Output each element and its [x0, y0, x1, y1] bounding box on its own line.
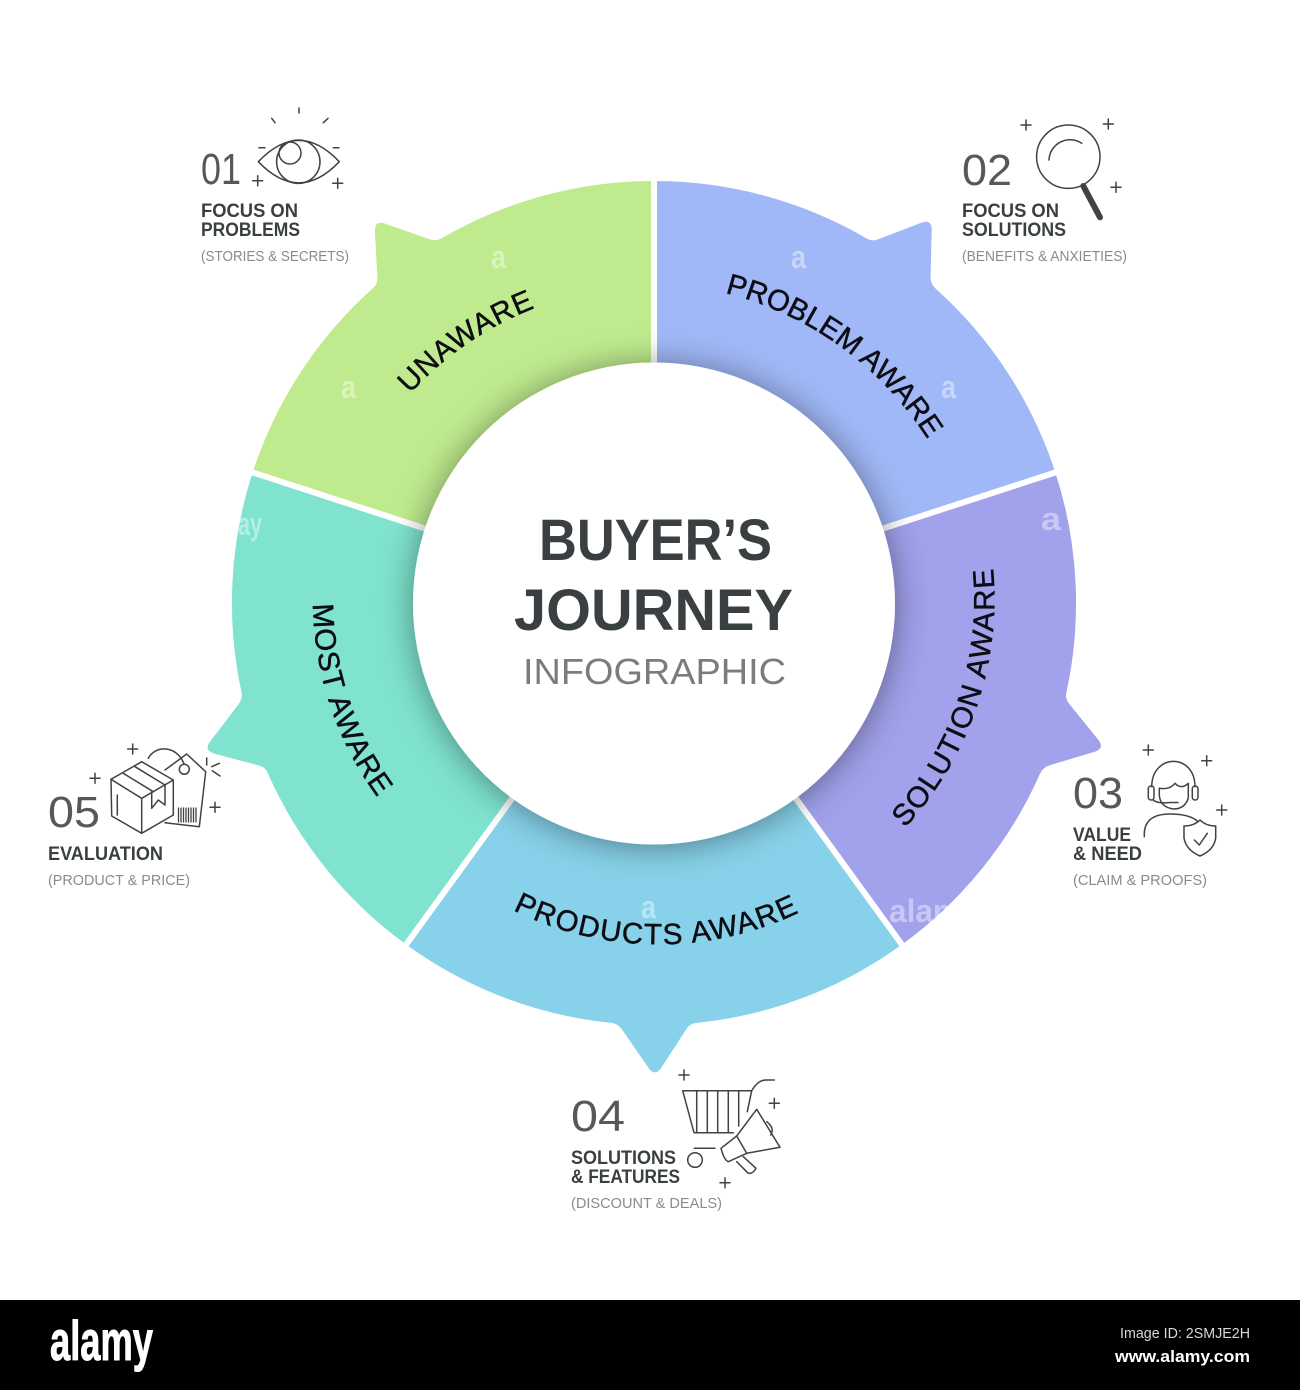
donut diagram: a — [491, 239, 506, 275]
label: unaware: UNAWARE — [396, 290, 534, 390]
block 02: focus on solutions: (BENEFITS & ANXIETIES) — [962, 248, 1127, 265]
block 02: focus on solutions: SOLUTIONS — [962, 220, 1066, 241]
footer bar — [0, 1300, 1300, 1390]
segment: solution aware — [654, 473, 1179, 985]
icon: magnifying glass — [1021, 119, 1121, 217]
title: BUYER’S — [539, 508, 772, 573]
donut diagram: a — [941, 369, 956, 405]
label: solution aware: SOLUTION AWARE — [893, 570, 995, 825]
segment: problem aware — [654, 181, 1055, 603]
block 02: focus on solutions — [962, 119, 1127, 265]
block 05: evaluation: 05 — [48, 788, 100, 837]
icon: cart and megaphone — [679, 1070, 780, 1188]
donut diagram: a — [641, 889, 656, 925]
block 04: solutions and features: & FEATURES — [571, 1167, 680, 1188]
footer url: www.alamy.com — [1114, 1347, 1250, 1366]
donut diagram: ay — [238, 506, 262, 542]
segment: most aware — [81, 367, 654, 944]
block 05: evaluation — [48, 744, 220, 889]
donut diagram: alam — [889, 893, 961, 929]
label: most aware: MOST AWARE — [312, 605, 394, 797]
footer image id: Image ID: 2SMJE2H — [1120, 1325, 1250, 1342]
block 01: focus on problems: PROBLEMS — [201, 220, 300, 241]
block 03: value and need: VALUE — [1073, 825, 1131, 846]
title — [514, 508, 793, 692]
block 05: evaluation: (PRODUCT & PRICE) — [48, 872, 190, 889]
block 01: focus on problems: FOCUS ON — [201, 201, 298, 222]
donut diagram: a — [791, 239, 806, 275]
icon: eye — [253, 108, 343, 188]
block 04: solutions and features — [571, 1070, 780, 1212]
block 03: value and need — [1073, 745, 1227, 889]
block 01: focus on problems: (STORIES & SECRETS) — [201, 248, 349, 265]
block 03: value and need: (CLAIM & PROOFS) — [1073, 872, 1207, 889]
block 03: value and need: 03 — [1073, 769, 1123, 818]
block 04: solutions and features: SOLUTIONS — [571, 1148, 676, 1169]
block 01: focus on problems: 01 — [201, 145, 241, 194]
icon: box and price tag — [90, 744, 220, 833]
donut diagram — [81, 91, 1179, 1180]
label: problem aware: PROBLEM AWARE — [727, 274, 944, 438]
center white circle — [413, 362, 895, 844]
label: products aware: PRODUCTS AWARE — [514, 892, 798, 945]
title: JOURNEY — [514, 578, 793, 643]
block 03: value and need: & NEED — [1073, 844, 1142, 865]
title: INFOGRAPHIC — [523, 651, 786, 692]
donut diagram: a — [341, 369, 356, 405]
block 04: solutions and features: 04 — [571, 1092, 625, 1141]
block 02: focus on solutions: 02 — [962, 146, 1012, 195]
block 05: evaluation: EVALUATION — [48, 844, 163, 865]
footer logo: alamy — [50, 1309, 153, 1372]
block 04: solutions and features: (DISCOUNT & DEALS) — [571, 1195, 722, 1212]
icon: support agent with shield — [1143, 745, 1227, 856]
block 02: focus on solutions: FOCUS ON — [962, 201, 1059, 222]
segment: products aware — [329, 603, 902, 1180]
segment: unaware — [253, 91, 778, 603]
block 01: focus on problems — [201, 108, 349, 265]
donut diagram: a — [1041, 501, 1061, 537]
